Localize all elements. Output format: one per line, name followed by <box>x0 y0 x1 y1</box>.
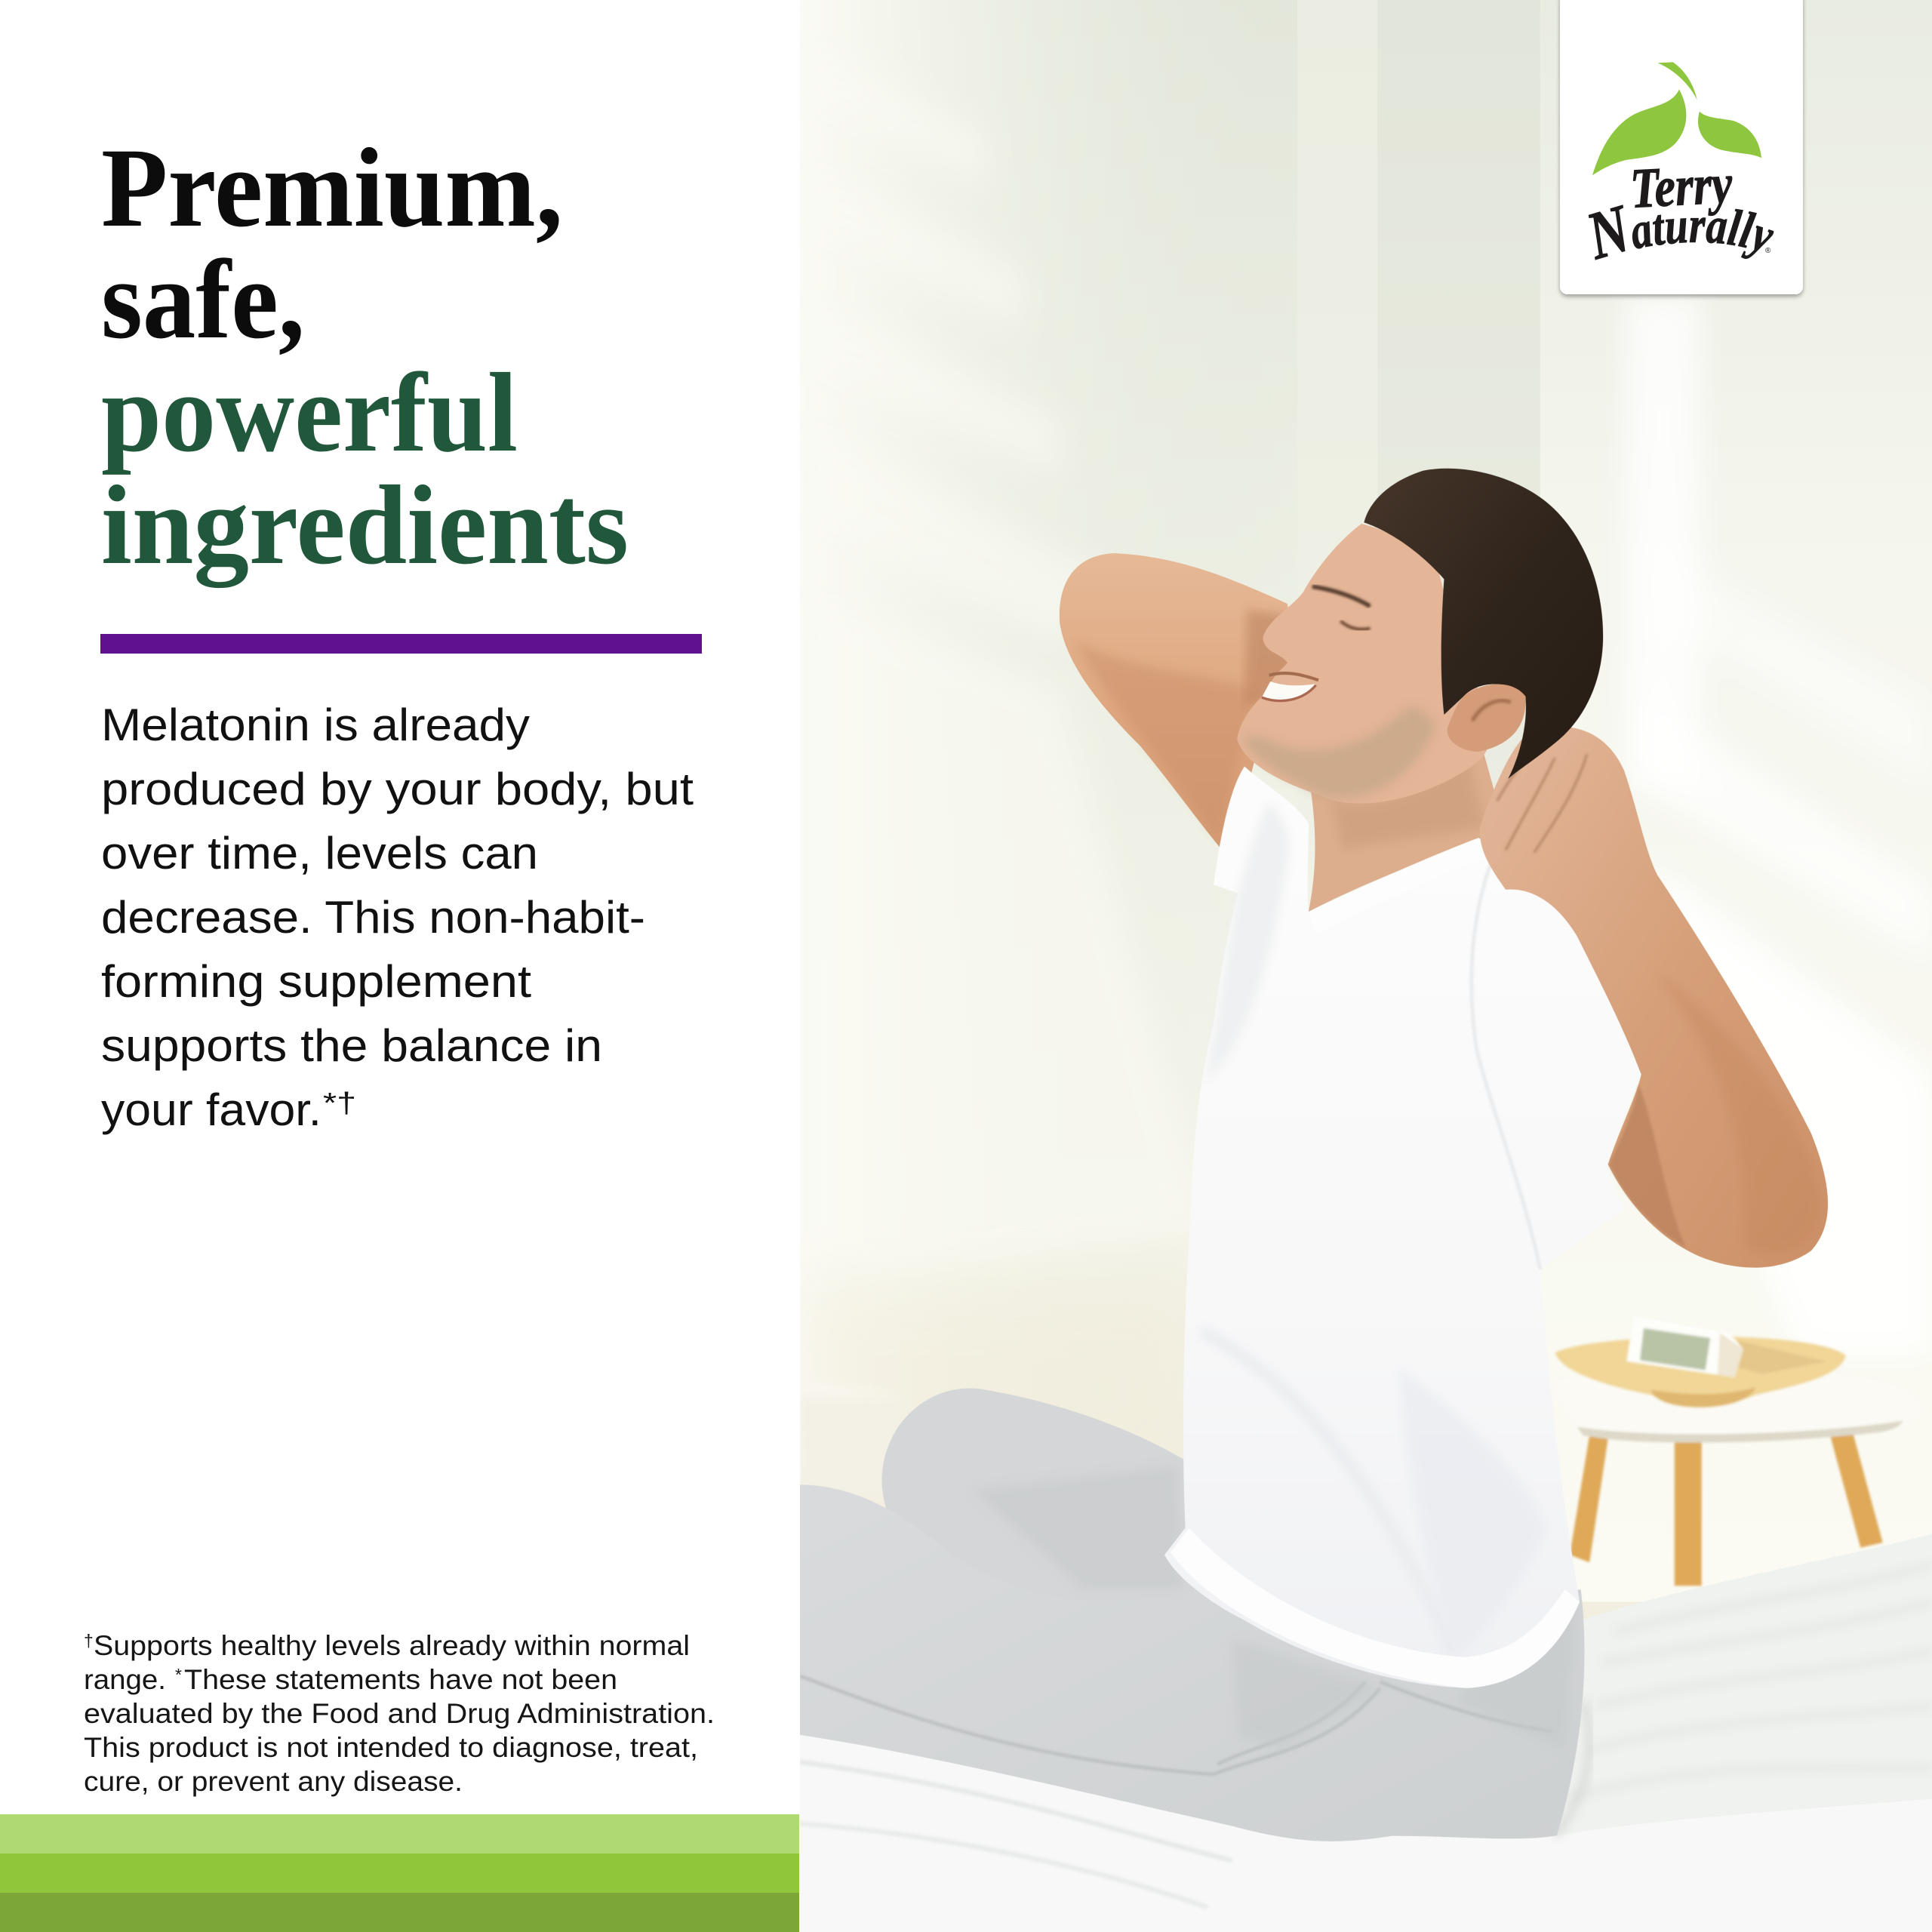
body text: forming supplement <box>101 956 531 1007</box>
footnote: * <box>175 1665 182 1684</box>
logo: Terry Naturally <box>1588 62 1774 260</box>
footnote: range. <box>84 1664 166 1695</box>
body text: decrease. This non-habit- <box>101 892 645 943</box>
hair <box>1364 469 1603 779</box>
icon: green leaves <box>1592 62 1761 175</box>
body text: Melatonin is already <box>101 700 530 750</box>
body text: *† <box>323 1088 356 1119</box>
wall background <box>800 0 1932 1620</box>
footnote: Supports healthy levels already within normal <box>94 1630 690 1661</box>
panel: white text column <box>0 0 800 1932</box>
head and face <box>1237 524 1491 804</box>
footnote: These statements have not been <box>184 1664 617 1695</box>
wordmark: Terry <box>1629 152 1734 220</box>
purple rule <box>100 634 702 654</box>
heading <box>101 125 629 588</box>
body text: produced by your body, but <box>101 764 694 814</box>
footnote: This product is not intended to diagnose, treat, <box>84 1732 698 1763</box>
photo: man stretching on bed <box>800 0 1932 1932</box>
body text: over time, levels can <box>101 828 538 878</box>
heading: safe, <box>101 237 305 362</box>
footnote: cure, or prevent any disease. <box>84 1766 463 1797</box>
pillow and bed on the right <box>1558 1534 1932 1835</box>
wordmark: Naturally <box>1588 205 1774 260</box>
heading: Premium, <box>101 125 563 251</box>
neck <box>1309 690 1497 912</box>
bedside box, left <box>801 1408 831 1478</box>
grey sweatpants <box>800 1389 1584 1873</box>
right arm with raised fist <box>1480 727 1828 1268</box>
side table with wooden legs <box>1570 1420 1903 1588</box>
left arm behind head <box>1060 553 1291 851</box>
wordmark: ® <box>1765 247 1771 255</box>
plate <box>1555 1337 1846 1407</box>
body text <box>101 700 694 1135</box>
ear <box>1447 685 1526 752</box>
wordmark <box>1588 152 1774 260</box>
footnote: † <box>84 1631 94 1651</box>
logo card <box>1558 0 1805 299</box>
green footer stripes <box>0 1814 799 1932</box>
white t-shirt <box>1164 767 1641 1688</box>
heading: powerful <box>101 350 518 475</box>
body text: supports the balance in <box>101 1020 602 1071</box>
heading: ingredients <box>101 463 629 588</box>
footnote <box>84 1630 715 1797</box>
body text: your favor. <box>101 1084 321 1135</box>
footnote: evaluated by the Food and Drug Administration. <box>84 1698 715 1729</box>
alarm clock <box>1626 1316 1743 1377</box>
foreground duvet <box>800 1700 1932 1932</box>
